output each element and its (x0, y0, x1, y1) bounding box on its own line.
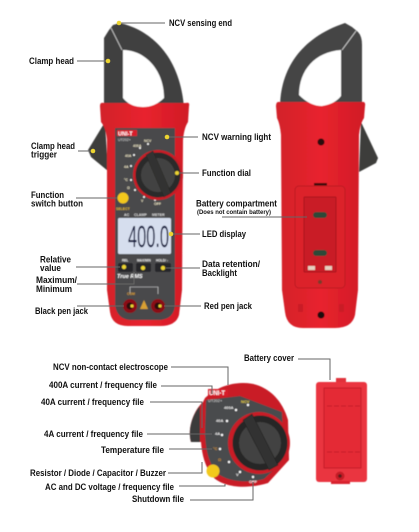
panel: front view of clamp meter: METER (152, 213, 165, 217)
range marks (124, 139, 162, 206)
panel: battery cover (316, 378, 367, 484)
clamp head trigger (88, 122, 108, 171)
True RMS label: True RMS (117, 274, 143, 280)
range marks: V (236, 472, 239, 477)
range marks (213, 399, 258, 484)
dial housing (190, 383, 289, 487)
body (276, 102, 365, 328)
label: Battery compartment (196, 198, 307, 217)
label: NCV non-contact electroscope (53, 362, 228, 385)
label: Resistor / Diode / Capacitor / Buzzer (30, 462, 202, 478)
panel: front view of clamp meter: SELECT (116, 207, 131, 211)
label: Function switch button (31, 190, 117, 208)
clamp head (104, 23, 184, 108)
label: Function dial (179, 168, 251, 178)
brand badge (117, 130, 137, 142)
label: NCV sensing end (117, 18, 232, 28)
label: Red pen jack (164, 301, 253, 311)
label: Clamp head trigger: trigger (31, 150, 57, 160)
label: NCV sensing end: NCV sensing end (169, 18, 232, 28)
buttons: MAX/MIN (137, 258, 152, 262)
label: NCV non-contact electroscope: NCV non-contact electroscope (53, 362, 168, 372)
label: Relative value (40, 254, 120, 273)
range marks: OFF (154, 202, 162, 206)
range marks: V (141, 199, 144, 203)
label: Red pen jack: Red pen jack (204, 301, 253, 311)
label: 40A current / frequency file: 40A current / frequency file (41, 397, 144, 407)
range marks: °C (213, 446, 218, 451)
brand badge: UNI-T (118, 132, 133, 138)
label: Function switch button: switch button (31, 198, 83, 208)
panel: back view of clamp meter (276, 23, 378, 328)
brand badge: UNI-T (209, 391, 225, 397)
label: Shutdown file (132, 482, 253, 504)
label: Relative value: value (40, 263, 61, 273)
label: Battery cover: Battery cover (244, 353, 294, 363)
label: Black pen jack: Black pen jack (35, 306, 89, 316)
screw hole (318, 138, 324, 146)
range marks: NCV (241, 399, 250, 404)
label: Data retention/Backlight: Data retention/ (202, 259, 260, 269)
body (100, 103, 189, 326)
clamp opening (299, 50, 341, 106)
label: Shutdown file: Shutdown file (132, 494, 184, 504)
label: 4A current / frequency file: 4A current / frequency file (44, 429, 143, 439)
LED display (118, 218, 171, 254)
label: NCV warning light (165, 132, 271, 142)
label: Temperature file: Temperature file (101, 445, 164, 455)
label: Function switch button: Function (31, 190, 64, 200)
control panel (115, 128, 175, 320)
label: Maximum/Minimum (36, 272, 134, 294)
select button (206, 464, 220, 478)
range marks: 4A (124, 165, 129, 169)
left ear (190, 406, 200, 442)
buttons: REL (122, 258, 128, 262)
label: Function dial: Function dial (202, 168, 251, 178)
lower screw and feet (298, 304, 344, 318)
input jacks: COM (127, 292, 135, 296)
label: 400A current / frequency file: 400A current / frequency file (49, 380, 157, 390)
range marks: °C (124, 178, 128, 182)
label: Maximum/Minimum: Maximum/ (36, 275, 77, 285)
grey face (205, 396, 284, 481)
function switch button (118, 192, 128, 204)
panel: front view of clamp meter (88, 23, 189, 326)
label: 400A current / frequency file (49, 380, 212, 394)
label: Clamp head: Clamp head (29, 56, 74, 66)
range marks: NCV (144, 139, 152, 143)
range marks: Ω (218, 457, 222, 462)
label: Maximum/Minimum: Minimum (36, 284, 72, 294)
brand badge (208, 389, 228, 403)
clamp head (280, 23, 362, 108)
brand badge: UT202+ (208, 398, 223, 403)
label: LED display: LED display (202, 229, 246, 239)
range marks: 40A (216, 418, 223, 423)
label: LED display (169, 229, 246, 239)
range marks: OFF (249, 479, 258, 484)
label: NCV warning light: NCV warning light (202, 132, 271, 142)
range marks: 400A (224, 405, 234, 410)
label: Battery compartment: Battery compartment (196, 198, 277, 208)
range marks: 40A (125, 154, 132, 158)
label: Battery cover (244, 353, 330, 380)
input jacks (123, 287, 165, 313)
function dial (133, 150, 183, 200)
range marks: 4A (215, 431, 220, 436)
label: Battery compartment: (Does not contain battery) (197, 209, 271, 216)
buttons: HOLD/☼ (156, 258, 169, 262)
label: Resistor / Diode / Capacitor / Buzzer: Resistor / Diode / Capacitor / Buzzer (30, 468, 166, 478)
trigger (359, 122, 378, 172)
label: AC and DC voltage / frequency file: AC and DC voltage / frequency file (45, 482, 174, 492)
label: Temperature file (101, 445, 212, 455)
battery compartment (295, 183, 345, 288)
dial knob (228, 412, 290, 474)
panel: front view of clamp meter: CLAMP (134, 213, 147, 217)
panel: dial close-up (190, 383, 290, 487)
buttons (118, 258, 171, 272)
clamp opening (123, 50, 164, 107)
label: Clamp head trigger (31, 141, 95, 160)
label: Clamp head trigger: Clamp head (31, 141, 75, 151)
label: Data retention/Backlight (166, 259, 260, 278)
label: Clamp head (29, 56, 110, 66)
label: Relative value: Relative (40, 254, 71, 264)
label: 40A current / frequency file (41, 397, 202, 428)
range marks: Ω (127, 186, 130, 190)
range marks: 400A (133, 144, 142, 148)
label: Data retention/Backlight: Backlight (202, 268, 237, 278)
mode labels: AC (124, 213, 130, 217)
LED display: 400.0 (128, 219, 169, 254)
brand badge: UT202+ (118, 138, 131, 142)
